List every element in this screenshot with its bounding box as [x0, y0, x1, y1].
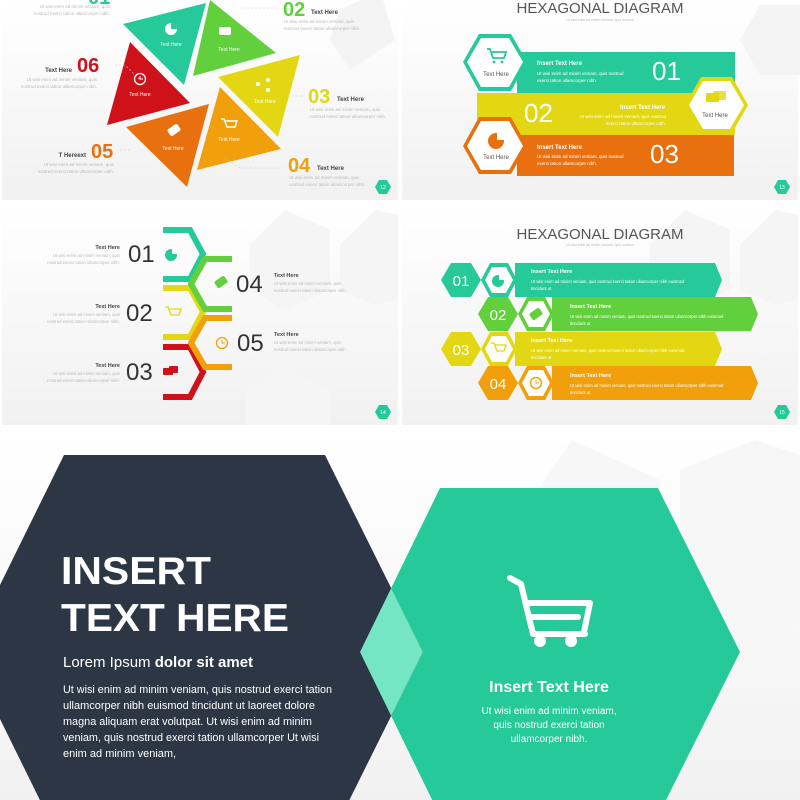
panel: bottom hero slide — [0, 435, 800, 800]
panel: slide 15 hexagonal diagram rows — [402, 203, 798, 425]
label 02: Text Here — [311, 10, 339, 16]
triangle: teal — [123, 3, 206, 85]
panel: slide 13 hexagonal diagram: Ut wisi enim ad minim veniam, quis nostrud — [566, 18, 634, 22]
band 02: Ut wisi enim ad minim veniam, quis nostrud — [579, 114, 666, 119]
label 04: 04 — [288, 155, 311, 177]
band 02 — [477, 93, 735, 135]
dark hexagon: enim ad minim veniam, — [63, 748, 176, 760]
chevron 02 — [163, 288, 203, 337]
numbers and labels: Ut wisi enim ad minim veniam, quis — [53, 312, 120, 317]
page number 14 — [375, 405, 391, 419]
panel: slide 13 hexagonal diagram — [402, 0, 800, 200]
numbers and labels: nostrud exerci tation ullamcorper nibh. — [47, 319, 120, 324]
triangle: red: Text Here — [129, 92, 151, 98]
label 02: Ut wisi enim ad minim veniam, quis — [284, 19, 355, 24]
label 06: Ut wisi enim ad minim veniam, quis — [27, 77, 98, 82]
triangle: teal: Text Here — [160, 42, 182, 48]
row 04: tincidunt ut — [570, 390, 591, 395]
page number 13: 13 — [779, 185, 785, 191]
page number 12 — [375, 180, 391, 194]
dark hexagon: ullamcorper nibh euismod tincidunt ut laoreet dolore — [63, 700, 315, 712]
row 02: 02 — [490, 307, 506, 324]
row 01: 01 — [453, 273, 469, 290]
hex: cart — [463, 34, 527, 91]
label 01 — [34, 0, 111, 16]
numbers and labels: 03 — [126, 359, 153, 386]
label 02: nostrud exerci tation ullamcorper nibh. — [284, 26, 360, 31]
dark hexagon: Ut wisi enim ad minim veniam, quis nostrud exerci tation — [63, 684, 332, 696]
label 04: Text Here — [317, 166, 345, 172]
band 02: exerci tation ullamcorper nibh. — [606, 121, 666, 126]
label 03: nostrud exerci tation ullamcorper nibh. — [310, 114, 386, 119]
label 03: 03 — [308, 86, 330, 108]
row 04: 04 — [490, 376, 506, 393]
row 03 — [441, 332, 722, 366]
dark hexagon: TEXT HERE — [61, 597, 289, 640]
page number 15: 15 — [779, 410, 785, 416]
numbers and labels: 04 — [236, 271, 263, 298]
hex: chat: Text Here — [702, 113, 728, 119]
triangle: red — [107, 42, 190, 125]
label 05: Ut wisi enim ad minim veniam, quis — [44, 162, 115, 167]
band 01: Insert Text Here — [537, 61, 583, 67]
numbers and labels: Text Here — [95, 304, 120, 310]
panel: slide 14 chevrons — [2, 203, 398, 425]
label 05: 05 — [91, 141, 113, 163]
row 04: Ut wisi enim ad minim veniam, quis nostrud exerci tation ullamcorper nibh euismod — [570, 383, 724, 388]
numbers and labels: Ut wisi enim ad minim veniam, quis — [53, 371, 120, 376]
row 01 — [441, 263, 722, 297]
teal hexagon — [360, 488, 740, 800]
panel: slide 15 hexagonal diagram rows: Ut wisi enim ad minim veniam, quis nostrud — [566, 243, 634, 247]
panel: slide 12 pinwheel — [2, 0, 398, 200]
hex: chat — [685, 77, 748, 133]
band 02: Insert Text Here — [620, 105, 666, 111]
label 01: nostrud exerci tation ullamcorper nibh. — [34, 11, 110, 16]
label 06: Text Here — [45, 68, 73, 74]
band 03: 03 — [650, 139, 679, 169]
label 04 — [288, 158, 365, 187]
page number 13 — [774, 180, 790, 194]
row 03: Ut wisi enim ad minim veniam, quis nostrud exerci tation ullamcorper nibh euismod — [531, 348, 685, 353]
page number 14: 14 — [380, 410, 386, 416]
chevron 04 — [191, 259, 232, 309]
triangle: orange: Text Here — [162, 146, 184, 152]
numbers and labels: nostrud exerci tation ullamcorper nibh. — [274, 288, 347, 293]
numbers and labels: nostrud exerci tation ullamcorper nibh. — [47, 260, 120, 265]
dark hexagon: veniam, quis nostrud exerci tation ullamcorper Ut wisi — [63, 732, 319, 744]
row 01: Insert Text Here — [531, 269, 572, 275]
dark hexagon: magna aliquam erat volutpat. Ut wisi enim ad minim — [63, 716, 312, 728]
row 02: tincidunt ut — [570, 321, 591, 326]
triangle: green — [193, 0, 276, 76]
numbers and labels: Text Here — [274, 332, 299, 338]
title: HEXAGONAL DIAGRAM — [517, 226, 683, 243]
row 02: Ut wisi enim ad minim veniam, quis nostrud exerci tation ullamcorper nibh euismod — [570, 314, 724, 319]
dark hexagon: Lorem Ipsum dolor sit amet — [63, 654, 253, 671]
label 05: T Hereext — [59, 153, 86, 159]
label 04: nostrud exerci tation ullamcorper nibh. — [289, 182, 365, 187]
numbers and labels: 01 — [128, 241, 155, 268]
row 03: Insert Text Here — [531, 338, 572, 344]
band 01: exerci tation ullamcorper nibh. — [537, 78, 597, 83]
label 03: Text Here — [337, 97, 365, 103]
triangle: amber: Text Here — [218, 137, 240, 143]
numbers and labels — [47, 241, 347, 386]
triangle: yellow — [218, 55, 300, 137]
numbers and labels: Ut wisi enim ad minim veniam, quis — [274, 281, 341, 286]
band 01: 01 — [652, 56, 681, 86]
label 02 — [283, 0, 360, 31]
band 03 — [517, 135, 734, 176]
label 06: 06 — [77, 55, 99, 77]
label 03 — [308, 89, 386, 119]
row 01: tincidunt ut — [531, 286, 552, 291]
numbers and labels: Text Here — [274, 273, 299, 279]
teal hexagon: Ut wisi enim ad minim veniam, — [481, 706, 617, 717]
triangle: orange — [126, 104, 209, 187]
icon: cart — [510, 578, 590, 634]
dark hexagon: INSERT — [61, 550, 211, 593]
numbers and labels: Text Here — [95, 363, 120, 369]
row 02: Insert Text Here — [570, 304, 611, 310]
label 05 — [38, 144, 114, 174]
page number 15 — [774, 405, 790, 419]
numbers and labels: 05 — [237, 330, 264, 357]
row 04 — [478, 366, 758, 400]
label 03: Ut wisi enim ad minim veniam, quis — [310, 107, 381, 112]
numbers and labels: Text Here — [95, 245, 120, 251]
label 04: Ut wisi enim ad minim veniam, quis — [289, 175, 360, 180]
chevron 05 — [191, 318, 232, 367]
triangle: yellow: Text Here — [254, 99, 276, 105]
band 01: Ut wisi enim ad minim veniam, quis nostrud — [537, 71, 624, 76]
label 01: Ut wisi enim ad minim veniam, quis — [40, 4, 111, 9]
label 06: nostrud exerci tation ullamcorper nibh. — [21, 84, 97, 89]
row 01: Ut wisi enim ad minim veniam, quis nostrud exerci tation ullamcorper nibh euismod — [531, 279, 685, 284]
triangle: green: Text Here — [218, 47, 240, 53]
band 03: Ut wisi enim ad minim veniam, quis nostrud — [537, 154, 624, 159]
band 02: 02 — [524, 98, 553, 128]
row 03: tincidunt ut — [531, 355, 552, 360]
chevron 03 — [163, 347, 203, 397]
numbers and labels: 02 — [126, 300, 153, 327]
triangle: amber — [197, 87, 281, 170]
numbers and labels: Ut wisi enim ad minim veniam, quis — [274, 340, 341, 345]
teal hexagon: quis nostrud exerci tation — [493, 720, 605, 731]
label 06 — [21, 58, 98, 89]
dark hexagon — [0, 455, 423, 800]
chevron 01 — [163, 230, 203, 279]
page number 12: 12 — [380, 185, 386, 191]
numbers and labels: nostrud exerci tation ullamcorper nibh. — [47, 378, 120, 383]
label 05: nostrud exerci tation ullamcorper nibh. — [38, 169, 114, 174]
title: HEXAGONAL DIAGRAM — [517, 0, 683, 17]
teal hexagon: ullamcorper nibh. — [511, 734, 587, 745]
hex: pie: Text Here — [483, 155, 509, 161]
numbers and labels: Ut wisi enim ad minim veniam, quis — [53, 253, 120, 258]
band 03: exerci tation ullamcorper nibh. — [537, 161, 597, 166]
hex: cart: Text Here — [483, 72, 509, 78]
row 02 — [478, 297, 758, 331]
row 03: 03 — [453, 342, 469, 359]
teal hexagon: Insert Text Here — [489, 679, 609, 696]
numbers and labels: nostrud exerci tation ullamcorper nibh. — [274, 347, 347, 352]
row 04: Insert Text Here — [570, 373, 611, 379]
hex: pie — [463, 117, 527, 174]
band 01 — [517, 52, 735, 93]
band 03: Insert Text Here — [537, 145, 583, 151]
